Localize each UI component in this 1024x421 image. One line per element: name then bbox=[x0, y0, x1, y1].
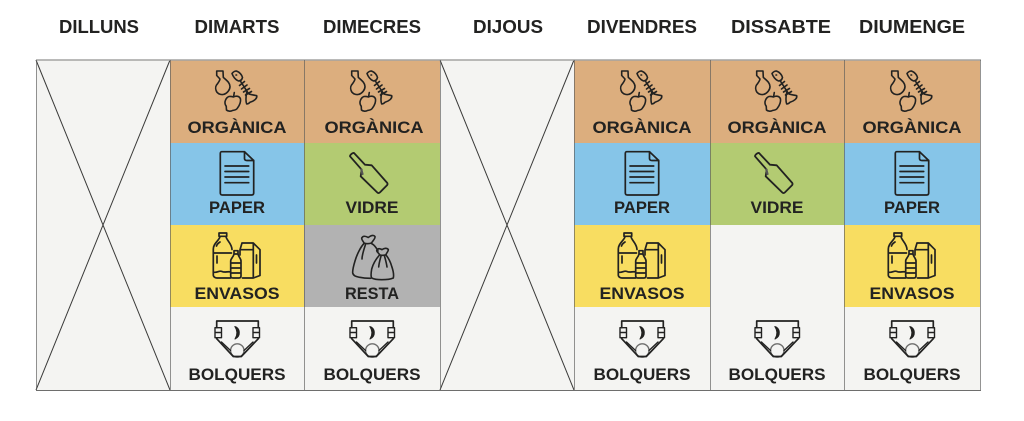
cell: vidre: VIDRE bbox=[750, 198, 804, 217]
cell: bolquers bbox=[574, 307, 710, 390]
cell: bolquers: BOLQUERS bbox=[324, 365, 420, 384]
cell: paper: PAPER bbox=[884, 198, 940, 217]
cell: resta: RESTA bbox=[345, 284, 399, 303]
panel: dissabte bbox=[710, 60, 844, 390]
cell: envasos: ENVASOS bbox=[194, 284, 280, 303]
cell: paper bbox=[170, 143, 304, 225]
heading: DISSABTE: DISSABTE bbox=[731, 17, 831, 37]
cell: paper: PAPER bbox=[614, 198, 670, 217]
cell: vidre bbox=[304, 143, 440, 225]
heading: DILLUNS: DILLUNS bbox=[59, 17, 139, 37]
cell: organica: ORGÀNICA bbox=[188, 118, 286, 137]
cell: envasos: ENVASOS bbox=[870, 284, 954, 303]
cell: organica bbox=[574, 60, 710, 143]
cell: organica: ORGÀNICA bbox=[862, 118, 962, 137]
panel: divendres bbox=[574, 60, 710, 390]
heading: DIVENDRES: DIVENDRES bbox=[587, 17, 697, 37]
panel: dimecres bbox=[304, 60, 440, 390]
cell: organica bbox=[710, 60, 844, 143]
cell: organica bbox=[304, 60, 440, 143]
cell: paper: PAPER bbox=[209, 198, 265, 217]
cell: vidre bbox=[710, 143, 844, 225]
cell: bolquers bbox=[304, 307, 440, 390]
cell: bolquers: BOLQUERS bbox=[188, 365, 286, 384]
cell: organica: ORGÀNICA bbox=[324, 118, 424, 137]
cell: bolquers: BOLQUERS bbox=[864, 365, 960, 384]
cell: organica bbox=[170, 60, 304, 143]
heading: DIUMENGE: DIUMENGE bbox=[859, 17, 965, 37]
cell: organica: ORGÀNICA bbox=[728, 118, 826, 137]
cell: resta bbox=[304, 225, 440, 307]
cell: organica bbox=[844, 60, 980, 143]
cell: envasos: ENVASOS bbox=[600, 284, 684, 303]
cell: bolquers bbox=[170, 307, 304, 390]
cell: bolquers: BOLQUERS bbox=[594, 365, 690, 384]
heading: DIMECRES: DIMECRES bbox=[323, 17, 421, 37]
cell: envasos bbox=[574, 225, 710, 307]
heading: DIJOUS: DIJOUS bbox=[473, 17, 543, 37]
cell: empty bbox=[710, 225, 844, 307]
cell: envasos bbox=[170, 225, 304, 307]
cell: envasos bbox=[844, 225, 980, 307]
heading: DIMARTS: DIMARTS bbox=[194, 17, 280, 37]
cell: paper bbox=[844, 143, 980, 225]
panel: dijous, no collection bbox=[440, 60, 574, 390]
cell: organica: ORGÀNICA bbox=[592, 118, 692, 137]
panel: diumenge bbox=[844, 60, 980, 390]
cell: paper bbox=[574, 143, 710, 225]
panel: dimarts bbox=[170, 60, 304, 390]
cell: bolquers bbox=[710, 307, 844, 390]
panel: dilluns, no collection bbox=[36, 60, 170, 390]
cell: vidre: VIDRE bbox=[346, 198, 398, 217]
cell: bolquers: BOLQUERS bbox=[728, 365, 826, 384]
cell: bolquers bbox=[844, 307, 980, 390]
